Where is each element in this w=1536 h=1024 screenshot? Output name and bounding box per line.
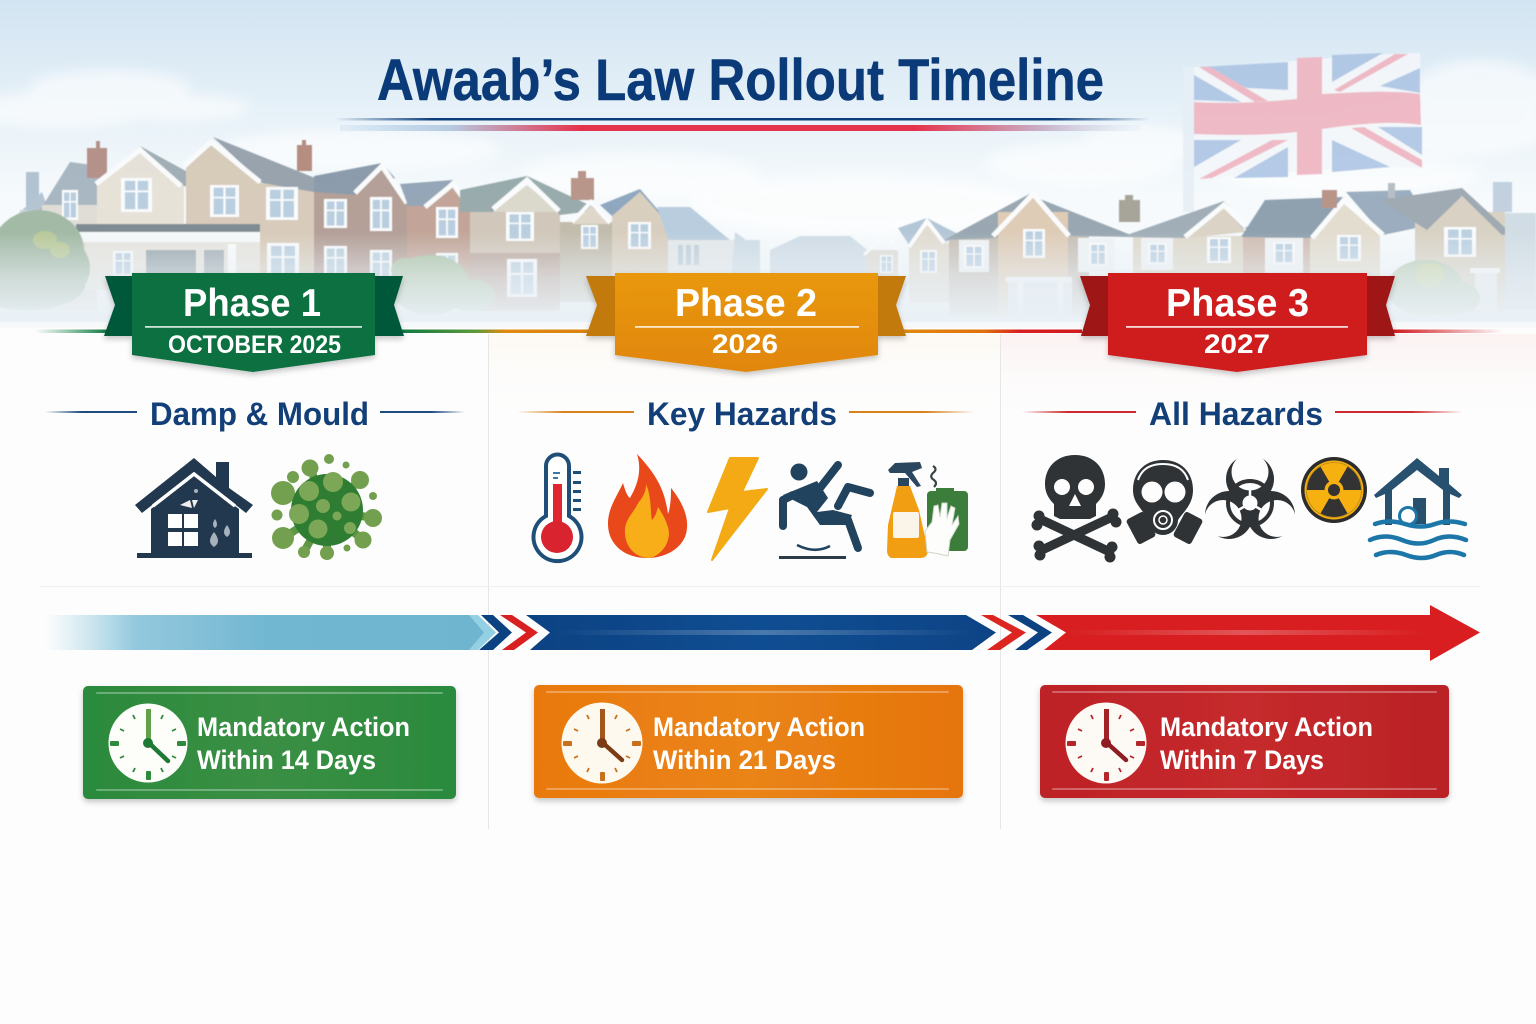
house 7 xyxy=(560,222,612,302)
action box: green: Within 14 Days xyxy=(197,745,376,775)
action box: green: Mandatory Action xyxy=(197,712,410,742)
phase 2 banner: Phase 2 xyxy=(675,282,817,325)
icon: fire xyxy=(608,454,687,558)
action box: red: Within 7 Days xyxy=(1160,745,1324,775)
icon: radiation xyxy=(1301,457,1367,523)
title: Awaab’s Law Rollout Timeline xyxy=(377,48,1104,113)
house 9 pale xyxy=(657,207,730,240)
icon: thermometer xyxy=(534,454,582,561)
small house b xyxy=(909,243,949,303)
title underline xyxy=(335,118,1150,131)
column dividers and tints xyxy=(40,334,1536,829)
action box: orange: Within 21 Days xyxy=(653,745,836,775)
icon: cleaning chemicals xyxy=(887,462,968,558)
fog over houses xyxy=(0,232,1536,323)
house 2 xyxy=(140,146,206,187)
porch xyxy=(86,240,260,290)
small house a xyxy=(866,250,898,300)
segment: phase 1 light blue xyxy=(45,615,496,650)
heading: all hazards: All Hazards xyxy=(1149,396,1323,432)
bush mid xyxy=(390,255,495,315)
main house c xyxy=(949,236,1089,316)
heading: damp and mould: Damp & Mould xyxy=(150,396,369,432)
chevrons between phase 1 and 2 xyxy=(479,615,538,650)
action box: red xyxy=(1040,685,1449,798)
right porch and tree xyxy=(1470,268,1500,273)
chevrons between phase 2 and 3 xyxy=(981,615,1052,650)
phase 3 banner: 2027 xyxy=(1204,329,1270,359)
icon: flooded house xyxy=(1370,458,1466,558)
banner connector line xyxy=(35,330,1503,333)
icon: damp house xyxy=(135,458,253,558)
house 8 xyxy=(612,215,670,305)
icon: biohazard xyxy=(1204,454,1296,539)
action box: orange: Mandatory Action xyxy=(653,712,865,742)
phase 1 banner: OCTOBER 2025 xyxy=(168,331,341,359)
segment: phase 2 navy xyxy=(526,615,996,650)
left tree xyxy=(0,210,90,310)
icon: lightning bolt xyxy=(708,458,767,560)
house 3 xyxy=(186,145,314,285)
house 5 xyxy=(407,205,472,305)
phase 1 banner xyxy=(104,273,404,372)
house 4 xyxy=(314,192,408,292)
clock icon xyxy=(108,704,188,782)
phase 1 banner: Phase 1 xyxy=(183,282,321,325)
segment: phase 3 red arrow xyxy=(1036,605,1480,661)
house e xyxy=(1243,236,1375,311)
house 1 xyxy=(40,162,110,210)
house f xyxy=(1415,212,1505,312)
terraced houses right xyxy=(770,182,1536,324)
house d xyxy=(1133,236,1243,306)
icon: skull and crossbones xyxy=(1032,455,1122,562)
action box: orange xyxy=(534,685,963,798)
clock icon xyxy=(562,702,642,784)
icon: gas mask xyxy=(1126,460,1203,545)
union jack flag on pole xyxy=(1183,53,1422,212)
phase 3 banner: Phase 3 xyxy=(1166,282,1309,325)
phase 2 banner: 2026 xyxy=(712,329,778,359)
phase 3 banner xyxy=(1080,273,1395,372)
action box: red: Mandatory Action xyxy=(1160,712,1373,742)
icon: person falling xyxy=(779,464,870,558)
phase 2 banner xyxy=(586,273,906,372)
action box: green xyxy=(83,686,456,799)
clock icon xyxy=(1066,702,1146,784)
heading: key hazards: Key Hazards xyxy=(647,396,837,432)
icon: mould spore xyxy=(271,454,382,560)
house 6 xyxy=(470,211,560,311)
terraced houses left xyxy=(0,137,760,315)
timeline arrow xyxy=(45,605,1480,661)
